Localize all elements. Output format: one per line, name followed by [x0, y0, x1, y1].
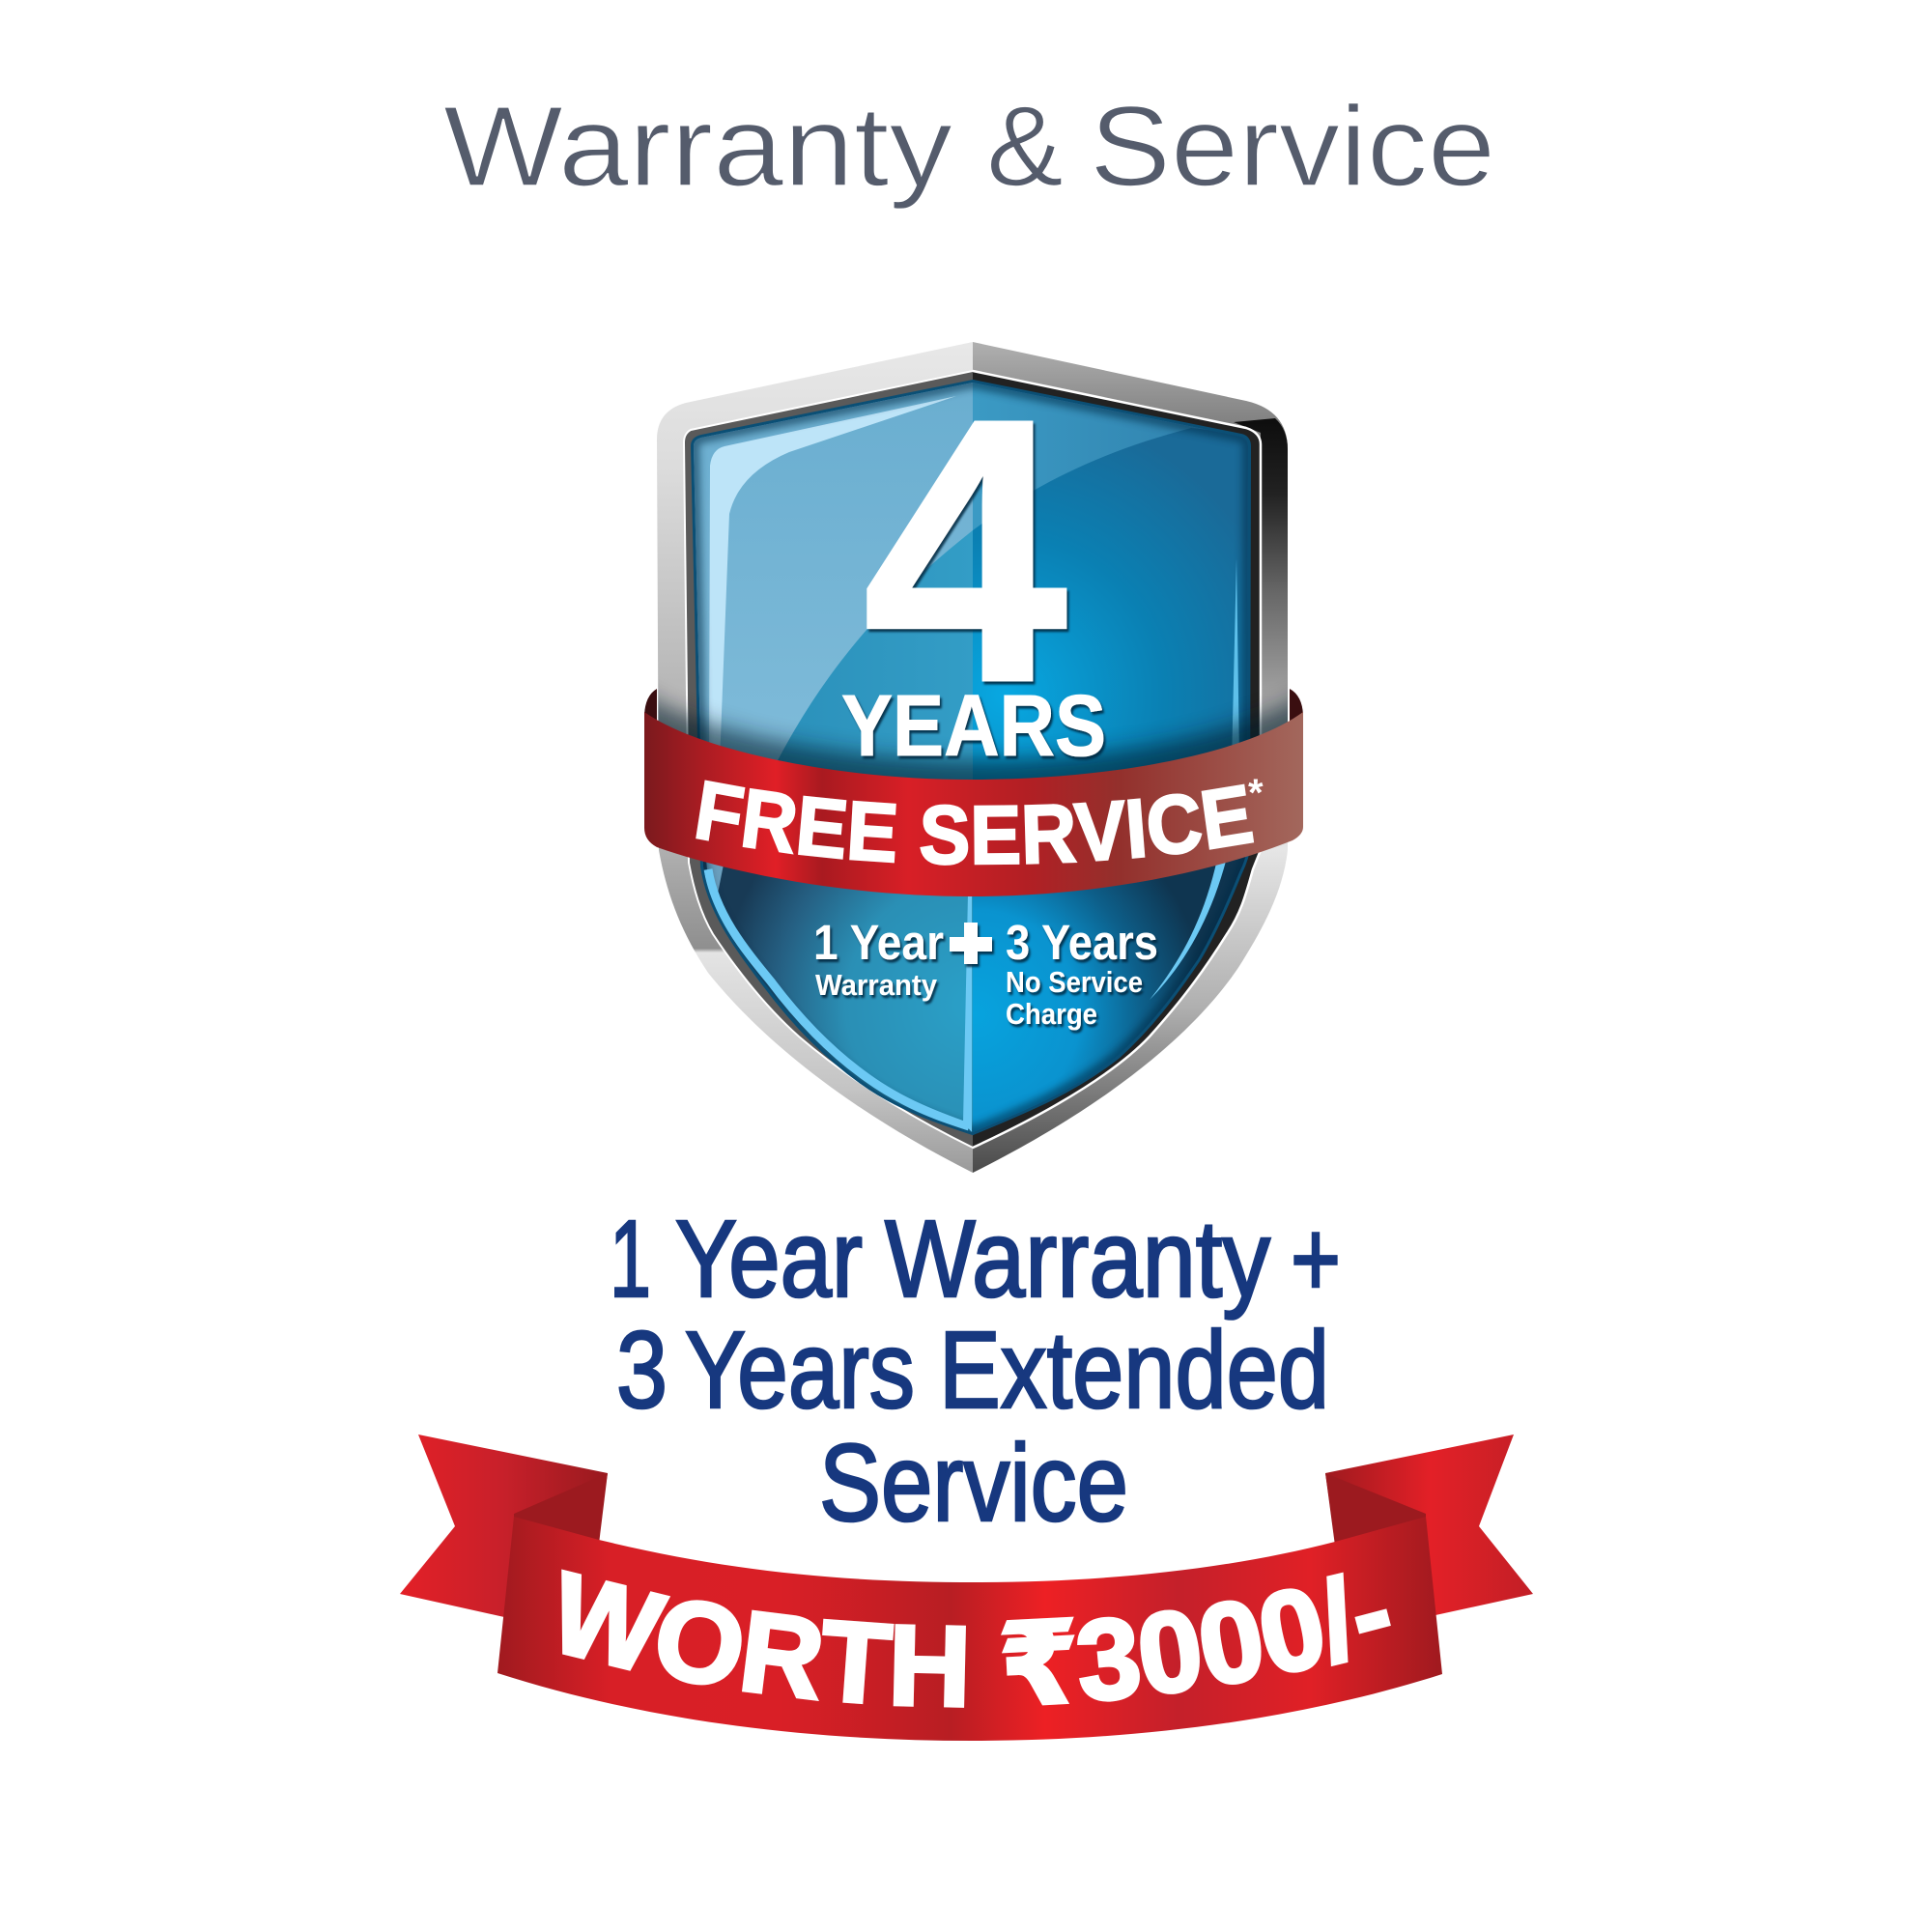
infographic: [400, 103, 1533, 1741]
offer description: [610, 1198, 1341, 1544]
ribbon right fold: [1325, 1473, 1426, 1546]
title: [443, 83, 1495, 211]
3 Years no service charge text: 3 Years: [1006, 915, 1158, 970]
offer description: +: [1291, 1198, 1341, 1320]
YEARS label: YEARS: [841, 678, 1106, 775]
3 Years no service charge text: No Service: [1006, 965, 1143, 999]
offer description: 1: [610, 1198, 651, 1320]
offer description: Years: [685, 1309, 915, 1431]
big number 4: 4: [863, 342, 1069, 760]
band back curl right: [1290, 689, 1303, 726]
offer description: 3: [616, 1309, 668, 1431]
offer description: Year: [675, 1198, 863, 1320]
shield badge: [644, 342, 1303, 1173]
1 Year warranty text: Warranty: [815, 968, 938, 1002]
3 Years no service charge text: [1006, 915, 1158, 1031]
icon: plus: [950, 923, 992, 964]
FREE SERVICE text: FREE SERVICE: [696, 781, 1254, 866]
title: Service: [1090, 83, 1495, 211]
shield blue glass face: [694, 383, 1246, 1132]
band back curl left: [644, 689, 657, 726]
red ribbon banner: [400, 1435, 1533, 1741]
title: &: [986, 83, 1064, 211]
ribbon right tail: [1325, 1435, 1533, 1615]
3 Years no service charge text: Charge: [1006, 997, 1097, 1031]
WORTH price text: WORTH ₹3000/-: [561, 1569, 1391, 1708]
band shadow on shield: [658, 687, 1288, 780]
red band: [644, 712, 1303, 896]
ribbon left fold: [514, 1473, 608, 1544]
1 Year warranty text: 1 Year: [813, 915, 944, 970]
1 Year warranty text: [813, 915, 944, 1002]
offer description: Warranty: [885, 1198, 1270, 1320]
offer description: Extended: [939, 1309, 1329, 1431]
ribbon main band: [497, 1517, 1442, 1741]
offer description: Service: [819, 1422, 1128, 1544]
shield metal frame: [657, 342, 1288, 1173]
title: Warranty: [443, 83, 952, 211]
ribbon left tail: [400, 1435, 608, 1617]
asterisk: *: [1248, 772, 1264, 814]
